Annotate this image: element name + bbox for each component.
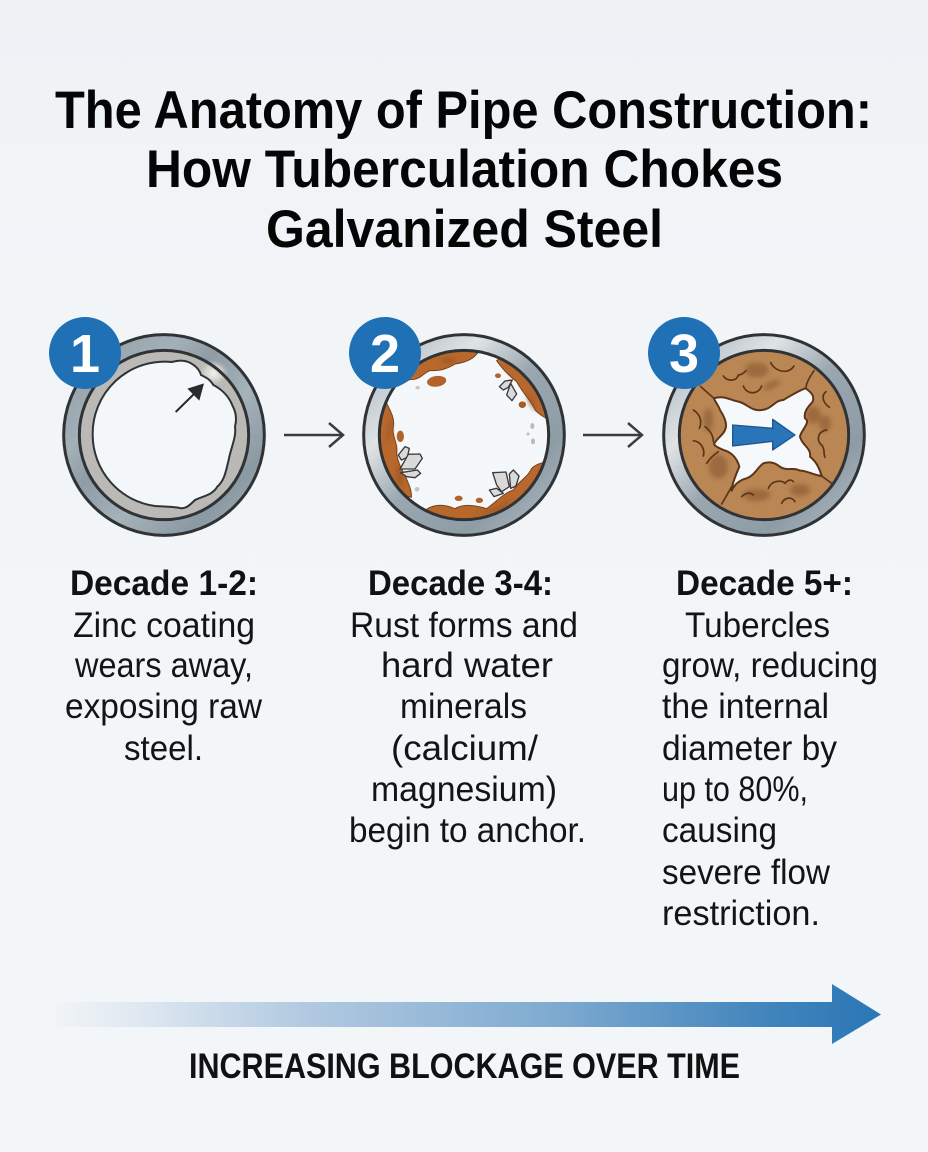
- title: Galvanized Steel: [266, 200, 663, 259]
- pipe 2: rust and mineral anchoring: [364, 335, 564, 537]
- rust deposit: bottom: [426, 462, 542, 518]
- darker tubercle patches: [704, 363, 831, 501]
- rust deposit: upper right: [496, 359, 546, 418]
- text block: decade 5+: the internal: [662, 687, 829, 726]
- badge 3: 3: [669, 324, 699, 384]
- text block: decade 3-4: Decade 3-4:: [368, 564, 553, 603]
- text block: decade 5+: up to 80%,: [662, 770, 808, 809]
- tubercle cracks and curls: [693, 363, 832, 504]
- title: [55, 81, 872, 259]
- text block: decade 3-4: (calcium/: [391, 729, 538, 768]
- pipe 1: zinc coating wearing away: [64, 335, 264, 535]
- rust deposit: left: [380, 403, 412, 498]
- badge 1: [49, 317, 121, 389]
- text block: decade 5+: severe flow: [662, 853, 831, 892]
- text block: decade 1-2: Decade 1-2:: [70, 564, 258, 603]
- text block: decade 5+: causing: [662, 811, 777, 850]
- text block: decade 1-2: exposing raw: [65, 687, 263, 726]
- icon: arrow pointing at worn zinc: [176, 383, 204, 412]
- mineral crystals: [398, 380, 519, 497]
- text block: decade 1-2: steel.: [124, 729, 203, 768]
- timeline caption: INCREASING BLOCKAGE OVER TIME: [189, 1047, 740, 1086]
- arrow: pipe 1 to pipe 2: [284, 423, 343, 447]
- text block: decade 5+: restriction.: [662, 894, 820, 933]
- open flow channel: [714, 388, 822, 491]
- text block: decade 1-2: Zinc coating: [73, 606, 255, 645]
- badge 3: [648, 317, 720, 389]
- text block: decade 3-4: magnesium): [371, 770, 557, 809]
- rust flakes and mineral specks: [397, 373, 535, 503]
- text block: decade 3-4: hard water: [381, 646, 553, 685]
- badge 1: 1: [70, 324, 100, 384]
- text block: decade 5+: Decade 5+:: [676, 564, 853, 603]
- pipe 3: tubercles choking flow: [664, 335, 864, 535]
- text block: decade 3-4: minerals: [400, 687, 527, 726]
- badge 2: [349, 317, 421, 389]
- text block: decade 5+: Tubercles: [685, 606, 830, 645]
- text block: decade 1-2: [65, 564, 263, 768]
- rust deposit: top: [402, 352, 478, 384]
- text block: decade 3-4: begin to anchor.: [349, 811, 586, 850]
- text block: decade 5+: grow, reducing: [662, 646, 878, 685]
- timeline arrow: [55, 984, 881, 1044]
- text block: decade 3-4: [349, 564, 586, 850]
- text block: decade 5+: [662, 564, 878, 933]
- text block: decade 3-4: Rust forms and: [350, 606, 578, 645]
- title: How Tuberculation Chokes: [146, 140, 783, 199]
- badge 2: 2: [370, 324, 400, 384]
- text block: decade 5+: diameter by: [662, 729, 837, 768]
- icon: restricted flow arrow: [733, 419, 795, 450]
- title: The Anatomy of Pipe Construction:: [55, 81, 872, 140]
- arrow: pipe 2 to pipe 3: [583, 423, 642, 447]
- text block: decade 1-2: wears away,: [74, 646, 253, 685]
